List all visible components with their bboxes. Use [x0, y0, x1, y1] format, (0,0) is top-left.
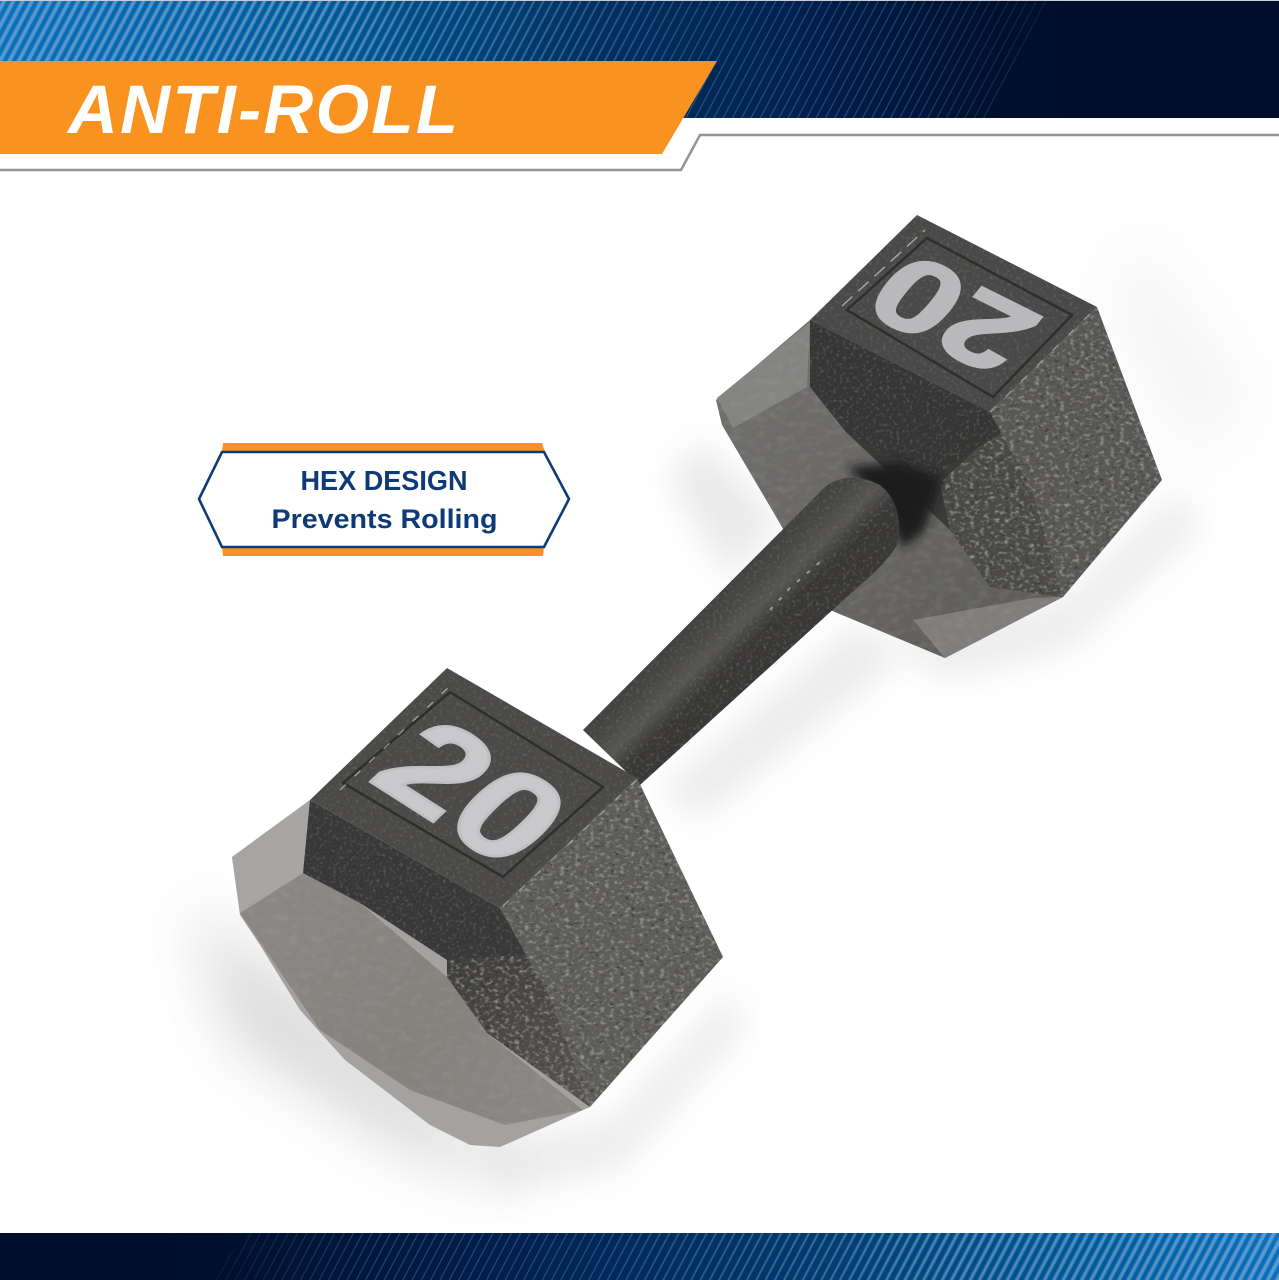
bottom footer band [0, 1233, 1279, 1280]
callout: hex design [199, 443, 569, 556]
dumbbell shadow [190, 230, 1260, 1195]
title banner [0, 61, 717, 154]
callout text: Prevents Rolling [272, 504, 498, 534]
top header band [0, 0, 1279, 118]
title: ANTI-ROLL [66, 71, 458, 148]
weight number, upper: 20 [844, 232, 1061, 397]
lower hex head [232, 668, 723, 1147]
handle [583, 478, 899, 785]
weight number, lower: 20 [344, 693, 601, 892]
grey header rule [0, 135, 1279, 170]
upper hex head [716, 215, 1162, 658]
dumbbell [232, 215, 1162, 1147]
callout heading: HEX DESIGN [300, 465, 468, 496]
